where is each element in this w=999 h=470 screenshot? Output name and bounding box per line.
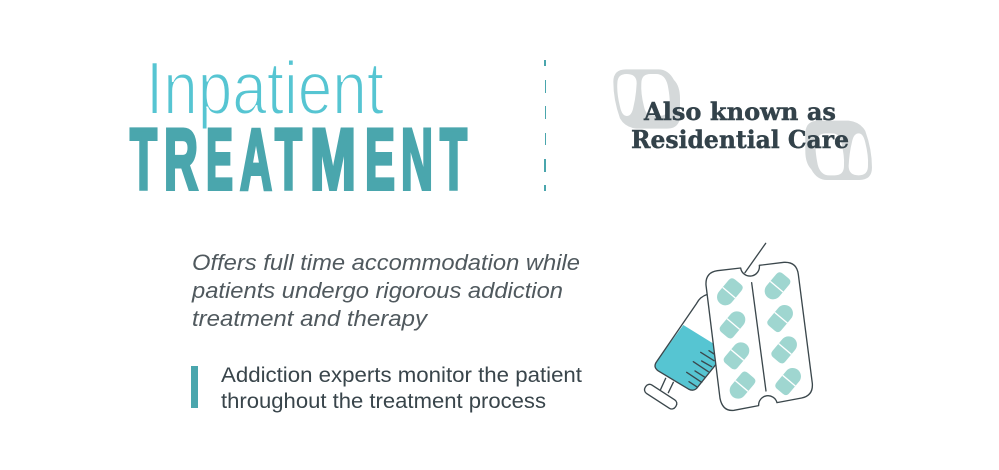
supporting text: Addiction experts monitor the patient [221,364,582,387]
title: TREATMENT [130,112,467,208]
icon: closing quote mark [805,121,872,180]
icon: syringe and blister pack [643,243,812,411]
syringe [643,294,717,411]
description text: treatment and therapy [192,306,429,331]
title: TREATMENT: T [440,112,467,208]
title: TREATMENT: A [240,112,272,208]
needle [745,243,766,273]
blister pack outline [706,262,812,410]
title: Inpatient: Inpatient [146,46,384,130]
supporting text [221,364,582,413]
description text: Offers full time accommodation while [192,250,580,275]
title: TREATMENT: E [365,112,395,208]
quote text [631,97,849,154]
title: TREATMENT: T [130,112,157,208]
quote text: Also known as [643,97,836,126]
vertical dashed divider [544,60,546,191]
quote text: Residential Care [631,125,849,154]
pill score lines [723,281,795,391]
pills [714,271,804,402]
title: TREATMENT: N [401,112,433,208]
blister divider [752,283,766,391]
title: TREATMENT: T [275,112,302,208]
title: TREATMENT: E [206,112,233,208]
title: TREATMENT: M [310,112,356,208]
title: TREATMENT: R [164,112,198,208]
supporting text: throughout the treatment process [221,390,546,413]
description text: patients undergo rigorous addiction [191,278,563,303]
description text [191,250,580,331]
icon: opening quote mark [613,69,680,129]
accent bar [191,366,198,408]
